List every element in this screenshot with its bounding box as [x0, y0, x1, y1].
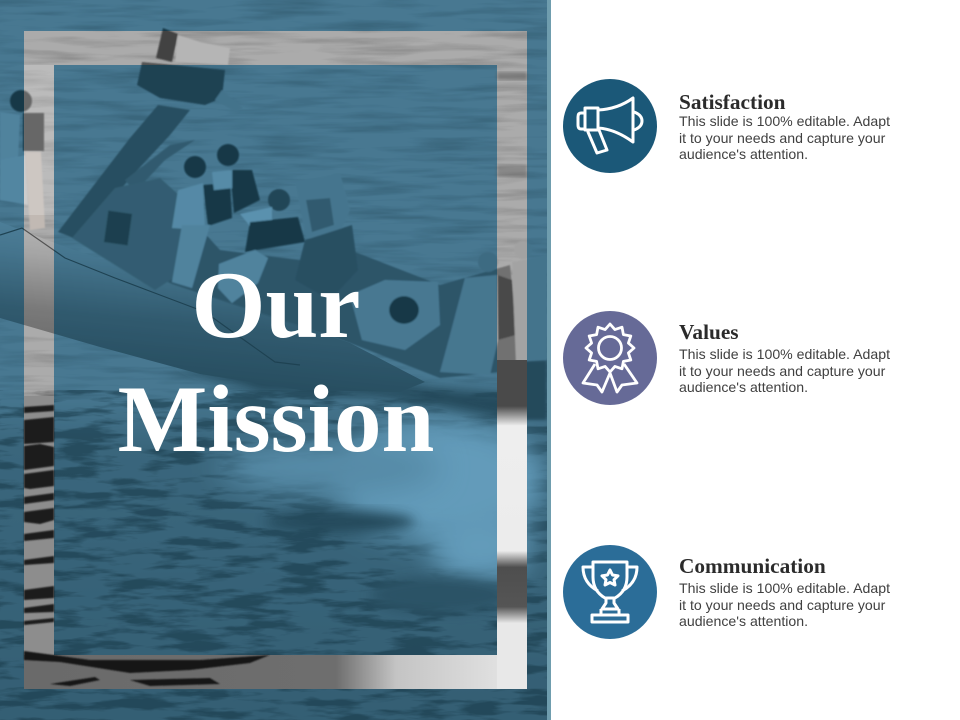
blue overlay, tint layer [0, 0, 548, 720]
boat upper structure and crew [0, 28, 547, 378]
text: Satisfaction body [679, 113, 890, 162]
text: Values body: audience's attention. [679, 379, 808, 395]
heading: Satisfaction: Satisfaction [679, 90, 786, 114]
text: Communication body: audience's attention. [679, 613, 808, 629]
boat hull [0, 222, 425, 392]
title [118, 252, 434, 472]
blue overlay, multiply layer [0, 0, 548, 720]
right edge strip [547, 0, 551, 720]
heading: Values: Values [679, 320, 739, 344]
frame band lighting and tones [24, 31, 527, 689]
icon: award ribbon [563, 311, 657, 405]
text: Communication body: it to your needs and capture your [679, 597, 885, 613]
spray and wake [170, 360, 547, 613]
grayscale photo scene [0, 0, 551, 720]
text: Communication body [679, 580, 890, 629]
text: Satisfaction body: This slide is 100% editable. Adapt [679, 113, 890, 129]
text: Values body [679, 346, 890, 395]
text: Values body: This slide is 100% editable. Adapt [679, 346, 890, 362]
title: Mission [118, 366, 434, 472]
heading: Communication: Communication [679, 554, 826, 578]
text: Satisfaction body: audience's attention. [679, 146, 808, 162]
text: Satisfaction body: it to your needs and capture your [679, 130, 885, 146]
title: Our [192, 252, 360, 358]
text: Values body: it to your needs and capture your [679, 363, 885, 379]
text: Communication body: This slide is 100% editable. Adapt [679, 580, 890, 596]
icon: trophy [563, 545, 657, 639]
icon: megaphone [563, 79, 657, 173]
panel: photo of military boat with blue frame overlay [0, 0, 551, 720]
